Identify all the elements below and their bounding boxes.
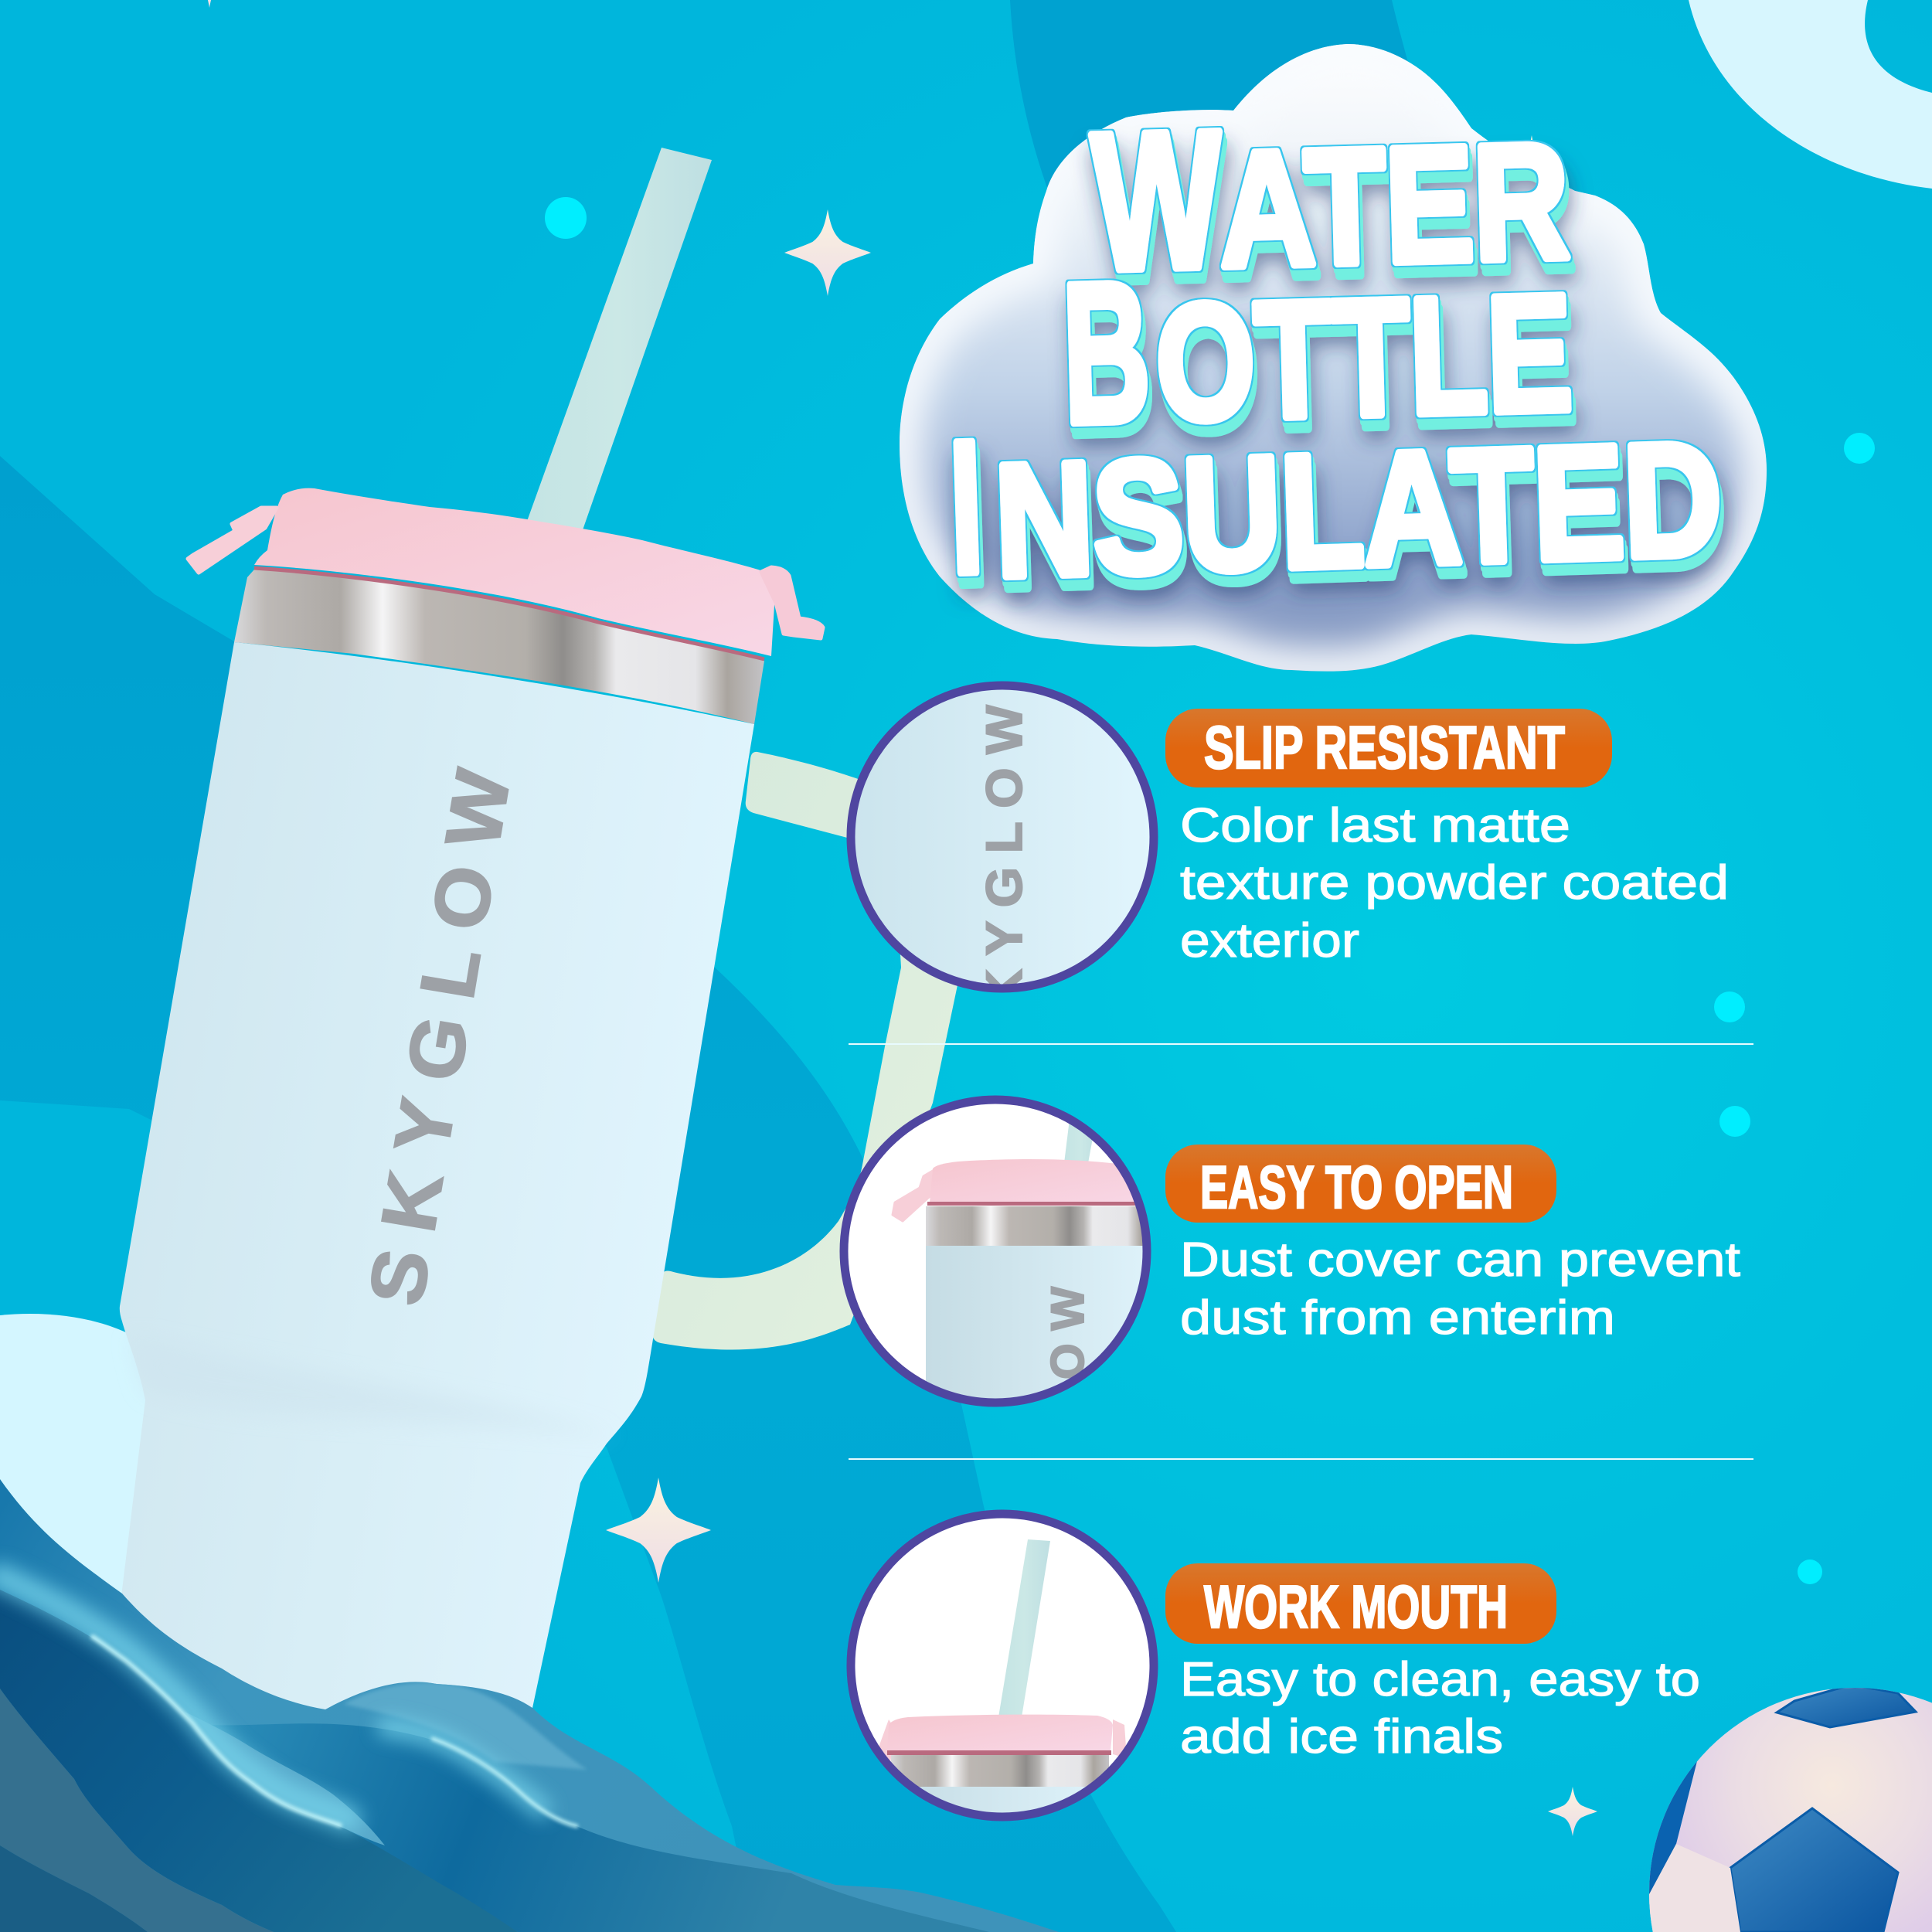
product: tumbler with straw and handle [120,148,958,1777]
description 3: Easy to clean, easy to [1180,1653,1700,1706]
handle [652,752,958,1350]
divider lines [849,1044,1753,1459]
description 3 [1180,1653,1700,1764]
ball surface [1646,1685,1932,1932]
fabric soft glow above folds [0,1577,541,1818]
brand text on tumbler: SKYGLOW [352,744,530,1311]
title line: Insulated: NSULATED [992,410,1724,611]
soft shading at body taper [131,1337,618,1437]
fabric hump highlight [344,1682,587,1770]
circle 3 lid [887,1715,1113,1751]
ball top pentagon [1777,1685,1916,1727]
title line: Bottle: OTTLE [1154,260,1574,456]
fabric wave [0,1468,1082,1932]
cloud badge [889,39,1777,680]
feature 1: slip resistant [851,685,1729,1055]
fabric fold: light patch [185,1712,385,1845]
description 2: Dust cover can prevent [1180,1233,1740,1287]
fabric fold: grey blue band [0,1689,274,1932]
description 3: add ice finals [1180,1710,1503,1764]
description 2 [1180,1233,1740,1345]
rose seal line [254,568,764,659]
circle 3 body [891,1787,1109,1824]
description 1 [1180,799,1729,968]
fabric fold: lower band [0,1845,148,1932]
steel band [234,570,764,724]
soccer ball [1623,1685,1932,1932]
background shape: top right pale ring [1689,0,1932,189]
zoom circle 3 [851,1514,1154,1824]
circle 1 brand text: SKYGLOW [975,692,1032,1055]
title line: Water: W [1090,90,1225,311]
circle 2 lid [930,1159,1151,1202]
title line: Insulated: I [947,401,986,613]
fabric fold: mid [192,1723,989,1932]
circle 2 straw [1064,1113,1097,1163]
circle 2 body [926,1246,1158,1416]
label pill 2 [1165,1145,1556,1223]
label pill 3 [1165,1563,1556,1644]
cloud rim light [900,44,1767,672]
circle 2 pull tab [893,1168,937,1221]
circle 2 steel band [926,1206,1158,1246]
fabric fold: deep crease [0,1590,518,1932]
cloud fill [889,39,1777,680]
label pill 2: EASY TO OPEN [1200,1153,1513,1221]
background shape: top dark blob [1010,0,1430,209]
title [947,80,1724,613]
background shape: bottom left pale blob [0,1314,247,1739]
description 1: Color last matte [1180,799,1570,852]
title line: Bottle: B [1060,240,1152,465]
circle 3 tabs [873,1719,1127,1770]
ball lower left panel [1648,1844,1740,1932]
lid [254,488,776,656]
circle 3 steel band [891,1755,1109,1787]
circle 2 brand text: OW [1042,1287,1094,1379]
decorative sparkle stars [179,0,1597,1836]
straw [526,148,712,541]
fabric base [0,1468,1082,1932]
description 1: texture powder coated [1180,856,1729,910]
tumbler body [120,642,754,1777]
ball left blue crescent [1623,1739,1698,1932]
decorative dots [545,197,1875,1584]
zoom circle 1 [851,685,1154,1055]
ball lower pentagon [1730,1808,1898,1932]
background shape: left and centre dark swoosh [0,456,1176,1932]
description 2: dust from enterim [1180,1291,1615,1345]
circle 3 straw [998,1539,1050,1717]
zoom circle 2 [844,1100,1158,1416]
label pill 1: SLIP RESISTANT [1204,713,1565,781]
label pill 1 [1165,709,1612,787]
label pill 3: WORK MOUTH [1204,1573,1508,1641]
feature 3: work mouth [851,1514,1700,1824]
right lid tab [761,567,823,638]
title line: Water: ATER [1217,109,1571,301]
fabric crisp highlights [93,1637,577,1826]
feature 2: easy to open [844,1100,1740,1416]
left lid tab [188,508,277,573]
description 1: exterior [1180,914,1359,968]
